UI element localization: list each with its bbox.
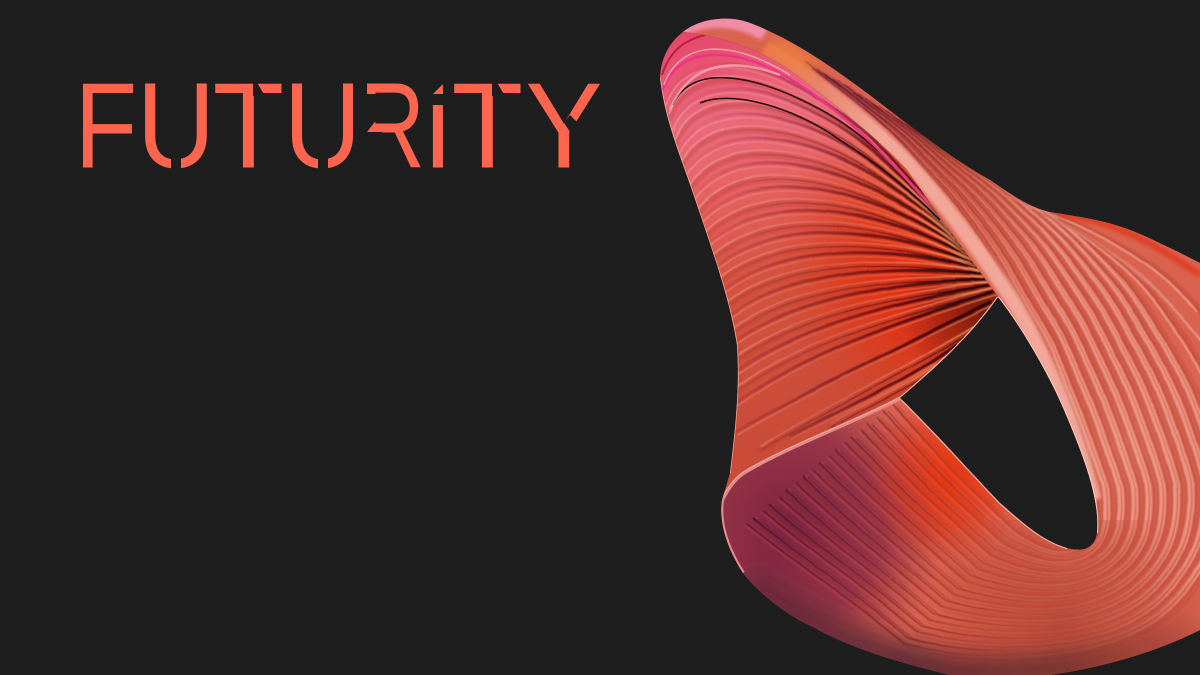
logo wordmark: FUTURITY: T [452,59,523,194]
edge of hole highlight [900,398,1067,548]
upper fan of folds [660,32,998,500]
top cap of band [680,21,765,34]
fan fold curves [666,65,996,450]
logo wordmark: FUTURITY: T [213,59,284,194]
logo wordmark: FUTURITY: U [137,58,215,194]
pink upper rim curves [662,35,930,205]
red streak on outer band edge [1060,214,1200,275]
hole edge highlight of fan [900,297,998,398]
crisp dark fold lines [673,78,940,220]
logo wordmark: FUTURITY: I [423,58,453,194]
logo wordmark: FUTURITY: U [284,58,361,194]
ribbon: right band and lower band [660,0,1200,675]
dark lines below the lip [754,68,1200,649]
left pale edge of fan [660,78,738,473]
tonal overlays above stripes [744,423,1190,675]
logo wordmark: FUTURITY: F [75,57,137,194]
band highlight strip [765,48,1094,500]
logo wordmark: FUTURITY: R [360,57,425,194]
logo wordmark: FUTURITY: Y [525,58,602,194]
lip of fan [722,398,900,500]
logo wordmark: FUTURITY [75,57,602,194]
lip edge of lower band [721,398,900,573]
dark falloff along the bottom edge [745,578,1200,674]
orange glow at band top [774,35,822,74]
ribbon stripes [745,61,1200,657]
